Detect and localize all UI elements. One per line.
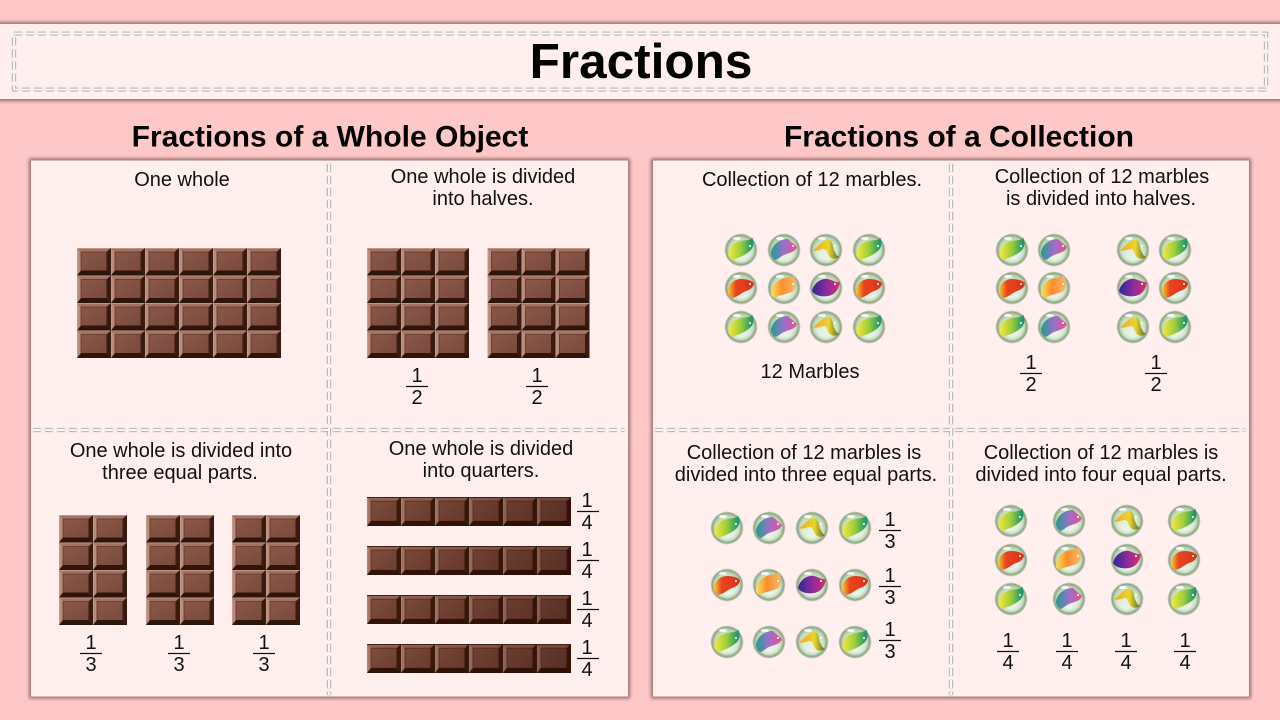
cell: collection of 12 xyxy=(702,169,922,383)
fraction: one half xyxy=(526,365,548,409)
chocolate bar: third 2 xyxy=(146,515,214,625)
marbles: quarter 1 xyxy=(994,504,1028,616)
marbles: second half xyxy=(1116,234,1192,344)
cell: collection thirds: Collection of 12 marbles is xyxy=(687,442,921,464)
fraction: one quarter xyxy=(577,588,599,632)
fraction: one third: 3 xyxy=(884,531,896,553)
title banner xyxy=(0,22,1280,101)
fraction: one quarter xyxy=(1115,630,1137,674)
fraction: one half: 2 xyxy=(531,387,543,409)
cell: thirds xyxy=(59,440,300,676)
chocolate strip 3 xyxy=(367,595,571,624)
fraction: one half xyxy=(1020,352,1042,396)
chocolate bar: third 1 xyxy=(59,515,127,625)
fraction: one half: 2 xyxy=(1150,374,1162,396)
fraction: one third xyxy=(879,619,901,663)
cell: collection quarters: Collection of 12 marbles is xyxy=(984,442,1218,464)
fraction: one quarter: 4 xyxy=(581,659,593,681)
fraction: one half xyxy=(1145,352,1167,396)
chocolate strip 1 xyxy=(367,497,571,526)
cell: quarters xyxy=(367,438,599,681)
cell: thirds: three equal parts. xyxy=(102,462,258,484)
fraction: one quarter: 4 xyxy=(1179,652,1191,674)
fraction: one quarter: 4 xyxy=(1002,652,1014,674)
fraction: one third: 1 xyxy=(258,632,270,654)
marbles: third row 2 xyxy=(710,568,872,602)
chocolate bar: third 3 xyxy=(232,515,300,625)
marbles: twelve xyxy=(724,234,886,344)
fraction: one third xyxy=(879,565,901,609)
cell: one whole: One whole xyxy=(134,169,230,191)
fraction: one third xyxy=(879,509,901,553)
cell: collection thirds: divided into three equal parts. xyxy=(675,464,937,486)
cell: quarters: into quarters. xyxy=(423,460,539,482)
fraction: one quarter xyxy=(997,630,1019,674)
heading: fractions of a whole object: Fractions of a Whole Object xyxy=(132,120,528,154)
cell: collection of 12: 12 Marbles xyxy=(761,361,859,383)
cell: collection quarters: divided into four equal parts. xyxy=(975,464,1227,486)
fraction: one third: 3 xyxy=(173,654,185,676)
fraction: one third: 3 xyxy=(85,654,97,676)
fraction: one quarter: 4 xyxy=(581,561,593,583)
marbles: quarter 4 xyxy=(1168,504,1200,616)
fraction: one third xyxy=(168,632,190,676)
fraction: one third xyxy=(253,632,275,676)
fraction: one quarter xyxy=(577,637,599,681)
fraction: one quarter: 4 xyxy=(1120,652,1132,674)
fraction: one quarter xyxy=(1174,630,1196,674)
fraction: one quarter xyxy=(577,490,599,534)
cell: halves: into halves. xyxy=(432,188,534,210)
chocolate strip 4 xyxy=(367,644,571,673)
fraction: one third: 3 xyxy=(258,654,270,676)
marbles: quarter 3 xyxy=(1110,504,1144,616)
fraction: one quarter: 1 xyxy=(1179,630,1191,652)
fraction: one third xyxy=(80,632,102,676)
fraction: one half xyxy=(406,365,428,409)
chocolate bar: half 1 xyxy=(367,248,469,358)
marbles: third row 3 xyxy=(710,626,872,658)
fraction: one quarter: 1 xyxy=(1120,630,1132,652)
fraction: one half: 2 xyxy=(1025,374,1037,396)
title banner: Fractions xyxy=(530,34,752,89)
cell: thirds: One whole is divided into xyxy=(70,440,292,462)
panel: fractions of a collection xyxy=(651,158,1251,698)
fraction: one third: 1 xyxy=(884,509,896,531)
cell: halves: One whole is divided xyxy=(391,166,575,188)
cell: one whole xyxy=(77,169,281,358)
fraction: one quarter xyxy=(577,539,599,583)
fraction: one third: 3 xyxy=(884,587,896,609)
cell: collection quarters xyxy=(975,442,1227,674)
marbles: third row 1 xyxy=(710,512,872,544)
fraction: one quarter: 4 xyxy=(581,610,593,632)
cell: collection halves: is divided into halves. xyxy=(1006,188,1196,210)
chocolate bar: whole xyxy=(77,248,281,358)
fraction: one half: 1 xyxy=(411,365,423,387)
cell: collection halves: Collection of 12 marbles xyxy=(995,166,1209,188)
fraction: one quarter: 4 xyxy=(581,512,593,534)
fraction: one quarter: 1 xyxy=(581,588,593,610)
panel: fractions of a whole object xyxy=(29,158,630,698)
marbles: first half xyxy=(996,234,1070,344)
fraction: one third: 1 xyxy=(173,632,185,654)
fraction: one half: 1 xyxy=(1150,352,1162,374)
cell: collection halves xyxy=(995,166,1209,396)
fraction: one quarter: 1 xyxy=(581,539,593,561)
fraction: one quarter: 1 xyxy=(581,490,593,512)
cell: collection thirds xyxy=(675,442,937,663)
fraction: one half: 1 xyxy=(531,365,543,387)
cell: collection of 12: Collection of 12 marbles. xyxy=(702,169,922,191)
fraction: one third: 1 xyxy=(884,619,896,641)
fraction: one quarter: 1 xyxy=(1002,630,1014,652)
fraction: one third: 1 xyxy=(884,565,896,587)
heading: fractions of a collection: Fractions of a Collection xyxy=(784,120,1134,154)
fraction: one quarter: 1 xyxy=(1061,630,1073,652)
chocolate bar: half 2 xyxy=(488,248,590,358)
fraction: one half: 1 xyxy=(1025,352,1037,374)
cell: quarters: One whole is divided xyxy=(389,438,573,460)
marbles: quarter 2 xyxy=(1052,504,1086,616)
cell: halves xyxy=(367,166,590,409)
fraction: one third: 3 xyxy=(884,641,896,663)
chocolate strip 2 xyxy=(367,546,571,575)
fraction: one half: 2 xyxy=(411,387,423,409)
fraction: one third: 1 xyxy=(85,632,97,654)
fraction: one quarter: 4 xyxy=(1061,652,1073,674)
fraction: one quarter xyxy=(1056,630,1078,674)
fraction: one quarter: 1 xyxy=(581,637,593,659)
